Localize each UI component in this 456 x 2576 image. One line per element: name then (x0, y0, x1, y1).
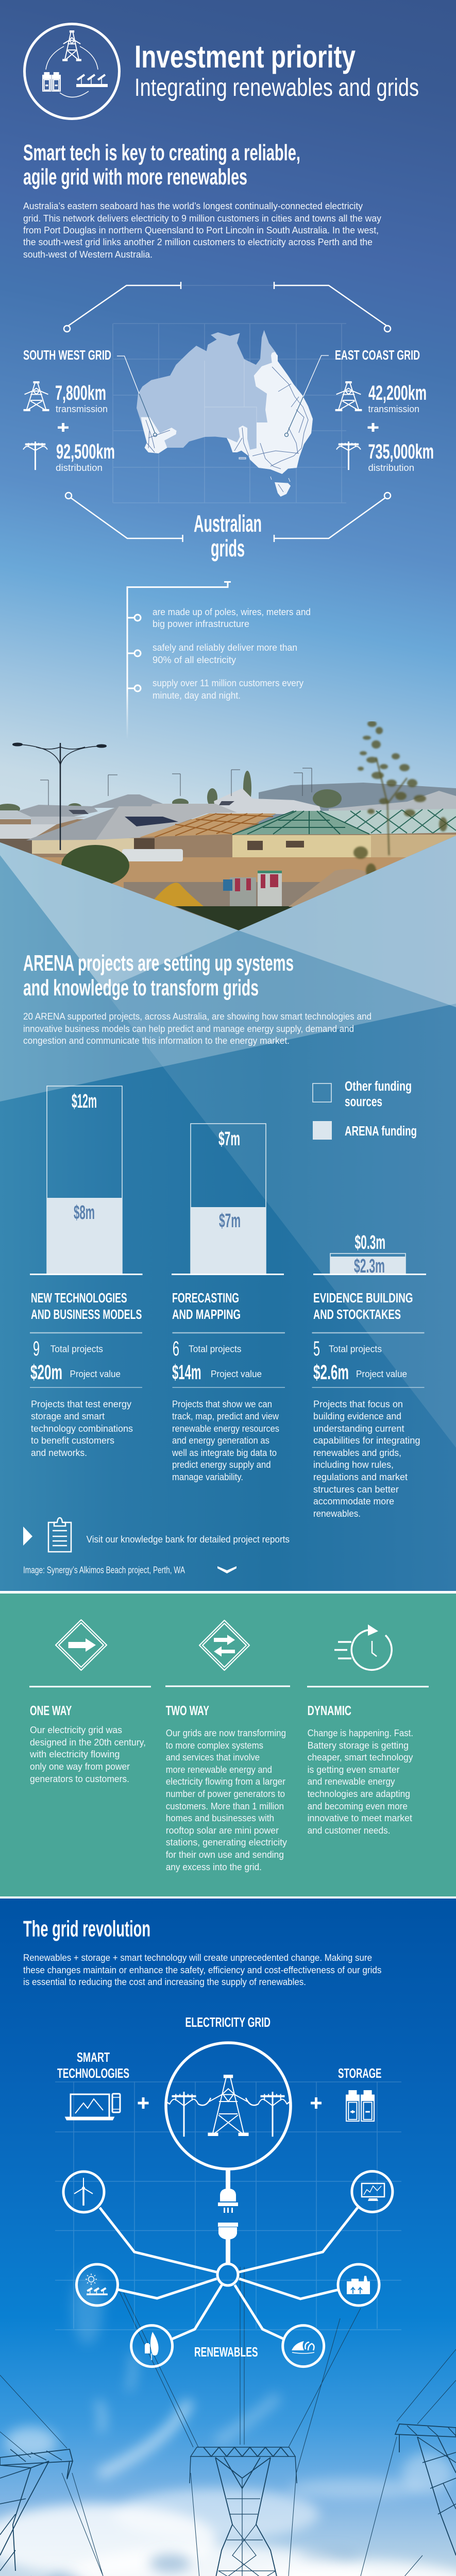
column body text: Projects that test energy (31, 1399, 131, 1410)
label: storage: STORAGE (338, 2066, 381, 2081)
column body text: technology combinations (31, 1423, 133, 1434)
item 2 text (153, 642, 297, 665)
south west grid block (23, 348, 157, 473)
heading: the grid revolution: The grid revolution (23, 1917, 150, 1941)
column heading (172, 1291, 241, 1322)
item 3 text (153, 678, 303, 701)
one way column (29, 1620, 151, 1784)
body text: for their own use and sending (166, 1850, 284, 1860)
stat: total projects (313, 1337, 382, 1360)
icon: two-way diamond (199, 1620, 249, 1670)
icon: one-way diamond (56, 1620, 107, 1670)
bar: new technologies (47, 1086, 122, 1275)
node: solar (76, 2264, 117, 2306)
node: monitoring (352, 2171, 393, 2212)
body text: to more complex systems (166, 1740, 263, 1751)
paragraph: grid revolution (23, 1953, 381, 1987)
connector frame around map (64, 282, 391, 542)
heading: smart tech: Smart tech is key to creating a reliable, (23, 140, 300, 165)
column body text: renewables and grids, (313, 1448, 401, 1458)
intro paragraph (23, 201, 381, 260)
street lamp (13, 743, 106, 850)
body text: any excess into the grid. (166, 1862, 262, 1872)
paragraph: ARENA projects: congestion and communicate this information to the energy market. (23, 1036, 290, 1046)
bar: evidence building: $0.3m (354, 1232, 385, 1253)
body text: stations, generating electricity (166, 1837, 287, 1848)
column body text: building evidence and (313, 1411, 401, 1421)
left tower (0, 2449, 73, 2576)
item 3 text: supply over 11 million customers every (153, 678, 303, 688)
stat: 7,800km transmission: 7,800km (55, 382, 106, 404)
node: biomass (131, 2326, 173, 2367)
body text: only one way from power (30, 1761, 130, 1772)
icon: transmission tower (336, 382, 361, 411)
stat: 735,000km distribution: distribution (368, 463, 414, 473)
stat: project value: Project value (356, 1369, 407, 1379)
bar baselines (30, 1274, 426, 1275)
two way column (165, 1620, 290, 1872)
body text: innovative to meet market (308, 1813, 412, 1823)
centre tower (190, 2447, 297, 2576)
bar: forecasting: $7m (219, 1210, 241, 1232)
bar: new technologies: $8m (74, 1202, 95, 1224)
item 1 text (153, 607, 311, 629)
panel: intro sky background (0, 0, 456, 855)
body text: technologies are adapting (308, 1789, 410, 1799)
column heading: NEW TECHNOLOGIES (31, 1291, 127, 1306)
column: new technologies and business models (30, 1291, 142, 1458)
heading: smart tech (23, 140, 300, 190)
stat: total projects: Total projects (329, 1344, 382, 1354)
heading: Australian grids: Australian (194, 510, 262, 537)
patches of blue in lower sky (44, 2548, 361, 2576)
column body text: predict energy supply and (172, 1460, 271, 1470)
stat: 92,500km distribution: distribution (56, 463, 103, 473)
plus sign (368, 423, 378, 432)
stat: 7,800km transmission: transmission (56, 404, 108, 414)
label: electricity grid: ELECTRICITY GRID (185, 2015, 271, 2030)
column body text (172, 1399, 279, 1482)
node 1 (127, 615, 141, 621)
diagram: grid revolution (57, 2015, 393, 2367)
item 2 text: safely and reliably deliver more than (153, 642, 297, 653)
label: renewables: RENEWABLES (194, 2345, 258, 2360)
stat: project value (30, 1361, 121, 1384)
body text: customers. More than 1 million (166, 1801, 284, 1811)
heading: smart tech: agile grid with more renewables (23, 164, 247, 190)
stat: total projects (173, 1337, 241, 1360)
column body text: storage and smart (31, 1411, 105, 1421)
column body text: capabilities for integrating (313, 1435, 420, 1446)
column: forecasting and mapping (172, 1291, 285, 1482)
body text: number of power generators to (166, 1789, 285, 1799)
column body text: structures can better (313, 1484, 399, 1495)
chevron down (217, 1566, 237, 1573)
item 2 text: 90% of all electricity (153, 655, 236, 665)
callout line to NSW (284, 355, 329, 437)
body text: and renewable energy (308, 1776, 395, 1787)
bar: forecasting (191, 1124, 266, 1275)
panel: grid types green background (0, 1594, 456, 1896)
paragraph: ARENA projects: innovative business models can help predict and manage energy supply, demand and (23, 1024, 354, 1034)
heading: ONE WAY (30, 1704, 72, 1718)
column body text: manage variability. (172, 1472, 243, 1482)
column body text: track, map, predict and view (172, 1411, 279, 1421)
heading: ARENA projects (23, 951, 294, 1001)
heading: TWO WAY (166, 1704, 209, 1718)
stat: total projects (33, 1337, 103, 1360)
body text: electricity flowing from a larger (166, 1776, 285, 1787)
plus sign (58, 423, 69, 432)
body text: and customer needs. (308, 1825, 391, 1836)
divider bar (1, 1591, 456, 1594)
body text: Battery storage is getting (308, 1740, 409, 1751)
dynamic column (307, 1624, 429, 1836)
legend: ARENA funding (345, 1124, 417, 1139)
photo: clouds (0, 2272, 456, 2576)
column body text (313, 1399, 420, 1519)
column body text: regulations and market (313, 1472, 408, 1482)
image caption: Image: Synergy’s Alkimos Beach project, Perth, WA (23, 1565, 185, 1575)
bar: evidence building: $2.3m (354, 1256, 385, 1277)
column body text: and networks. (31, 1448, 87, 1458)
column body text: including how rules, (313, 1460, 394, 1470)
legend: Other funding (345, 1079, 412, 1094)
column body text: renewable energy resources (172, 1423, 279, 1434)
paragraph: ARENA projects: 20 ARENA supported projects, across Australia, are showing how smart technologies and (23, 1011, 371, 1022)
stat: 42,200km transmission (368, 382, 427, 414)
callout line to WA (117, 356, 157, 437)
bracket line (127, 582, 231, 739)
photo: suburban houses under construction (0, 721, 456, 933)
body text: and services that involve (166, 1752, 260, 1762)
column body text: well as integrate big data to (172, 1448, 277, 1458)
photo: transmission towers and lines (0, 2267, 456, 2576)
body text: Our grids are now transforming (166, 1728, 286, 1738)
item 1 text: are made up of poles, wires, meters and (153, 607, 311, 617)
decorative diagram grid (55, 2081, 401, 2330)
intro paragraph: south-west of Western Australia. (23, 249, 153, 260)
legend (313, 1079, 417, 1140)
stat: total projects: 5 (313, 1337, 320, 1360)
column body text (31, 1399, 133, 1458)
stat: project value (172, 1361, 262, 1384)
heading: Australian grids (194, 510, 262, 562)
body text: and becoming even more (308, 1801, 408, 1811)
column body text: to benefit customers (31, 1435, 114, 1446)
column heading: AND STOCKTAKES (313, 1308, 401, 1322)
item 1 text: big power infrastructure (153, 619, 249, 629)
body text: homes and businesses with (166, 1813, 274, 1823)
header icon: grid, battery and solar in circle (25, 24, 120, 118)
plus sign (138, 2097, 148, 2109)
big circle: electricity grid (166, 2043, 291, 2169)
body text: is getting even smarter (308, 1765, 400, 1775)
column heading: AND BUSINESS MODELS (31, 1308, 142, 1322)
paragraph: grid revolution: is essential to reducing the cost and increasing the supply of renewables. (23, 1977, 306, 1987)
stat: 735,000km distribution (368, 440, 434, 473)
body text: more renewable energy and (166, 1765, 272, 1775)
heading: DYNAMIC (308, 1704, 351, 1718)
column body text: understanding current (313, 1423, 404, 1434)
column heading: FORECASTING (172, 1291, 239, 1306)
intro paragraph: Australia’s eastern seaboard has the world’s longest continually-connected electricity (23, 201, 363, 211)
paragraph: grid revolution: these changes maintain or enhance the safety, efficiency and cost-effectiveness of our grids (23, 1965, 381, 1975)
heading: ARENA projects: and knowledge to transform grids (23, 975, 259, 1001)
label: smart technologies: TECHNOLOGIES (57, 2066, 129, 2081)
column body text: and energy generation as (172, 1435, 269, 1446)
stat: total projects: 6 (173, 1337, 179, 1360)
overhead wires (0, 2267, 456, 2576)
body text: Change is happening. Fast. (308, 1728, 413, 1738)
list: what grids do (127, 582, 311, 739)
heading: ARENA projects: ARENA projects are setting up systems (23, 951, 294, 976)
column heading (31, 1291, 142, 1322)
body text: rooftop solar are mini power (166, 1825, 279, 1836)
body text: Our electricity grid was (30, 1725, 122, 1735)
paragraph: grid revolution: Renewables + storage + smart technology will create unprecedented change. Making sure (23, 1953, 372, 1963)
legend: sources (345, 1095, 382, 1109)
label: smart technologies: SMART (77, 2050, 110, 2065)
stat: project value: Project value (70, 1369, 121, 1379)
bar chart: funding by category (30, 1086, 426, 1277)
arrow marker (23, 1527, 32, 1546)
column heading: AND MAPPING (172, 1308, 241, 1322)
link text: Visit our knowledge bank for detailed project reports (87, 1534, 290, 1545)
divider bar (0, 1896, 456, 1899)
node 3 (127, 685, 141, 691)
heading: Australian grids: grids (211, 535, 245, 562)
icon: distribution pole (336, 442, 361, 470)
right tower (395, 2424, 456, 2555)
body text: generators to customers. (30, 1774, 129, 1784)
stat: total projects: 9 (33, 1337, 40, 1360)
column heading (313, 1291, 413, 1322)
stat: 7,800km transmission (55, 382, 108, 414)
icon: clipboard (48, 1518, 71, 1552)
east coast grid block (284, 348, 434, 473)
label: east coast grid: EAST COAST GRID (335, 348, 420, 363)
intro paragraph: from Port Douglas in northern Queensland to Port Lincoln in South Australia. In the west, (23, 225, 379, 235)
node: wind (63, 2172, 104, 2212)
node: factory (338, 2264, 379, 2306)
body text: designed in the 20th century, (30, 1737, 146, 1748)
stat: 92,500km distribution: 92,500km (56, 440, 115, 463)
column body text: accommodate more (313, 1496, 394, 1506)
icon: transmission tower (24, 382, 48, 411)
icon: batteries (346, 2091, 374, 2121)
bar: evidence building (330, 1232, 406, 1277)
body text (29, 1725, 146, 1784)
intro paragraph: grid. This network delivers electricity to 9 million customers in cities and towns all the way (23, 213, 381, 224)
stat: total projects: Total projects (189, 1344, 241, 1354)
icon: clock with speed lines (334, 1624, 392, 1670)
plug connector (218, 2170, 238, 2265)
stat: 92,500km distribution (56, 440, 115, 473)
node 2 (127, 650, 141, 656)
body text (308, 1728, 413, 1836)
link: knowledge bank (23, 1518, 290, 1552)
body text: cheaper, smart technology (308, 1752, 413, 1762)
stat: total projects: Total projects (50, 1344, 103, 1354)
column: evidence building and stocktakes (312, 1291, 425, 1519)
node: wave (283, 2326, 324, 2367)
item 3 text: minute, day and night. (153, 690, 241, 701)
column body text: Projects that show we can (172, 1399, 272, 1410)
icon: laptop and phone (66, 2094, 120, 2120)
label: smart technologies (57, 2050, 129, 2081)
stat: project value: $2.6m (313, 1361, 349, 1384)
body text (166, 1728, 287, 1872)
column body text: Projects that focus on (313, 1399, 403, 1410)
label: south west grid: SOUTH WEST GRID (23, 348, 111, 363)
panel: ARENA projects geometric background (0, 836, 456, 1591)
small background street lamps (40, 768, 312, 805)
stat: project value: $20m (30, 1361, 62, 1384)
column heading: EVIDENCE BUILDING (313, 1291, 413, 1306)
column body text: renewables. (313, 1509, 361, 1519)
title: Investment priority (134, 39, 356, 74)
blurred eucalyptus (353, 721, 447, 878)
plus sign (311, 2097, 322, 2109)
decorative map grid (113, 285, 346, 503)
stat: project value: $14m (172, 1361, 201, 1384)
body text: with electricity flowing (29, 1749, 120, 1759)
panel: grid revolution sky background (0, 1899, 456, 2576)
stat: 42,200km transmission: transmission (368, 404, 419, 414)
paragraph: ARENA projects (23, 1011, 371, 1046)
bar: new technologies: $12m (72, 1091, 97, 1112)
stat: project value (313, 1361, 407, 1384)
stat: project value: Project value (211, 1369, 262, 1379)
hub and branches (100, 2208, 358, 2339)
icon: distribution pole (23, 442, 47, 470)
bar: forecasting: $7m (218, 1128, 240, 1150)
map: Australia with grids (137, 330, 313, 497)
intro paragraph: the south-west grid links another 2 million customers to electricity across Perth and the (23, 237, 373, 247)
